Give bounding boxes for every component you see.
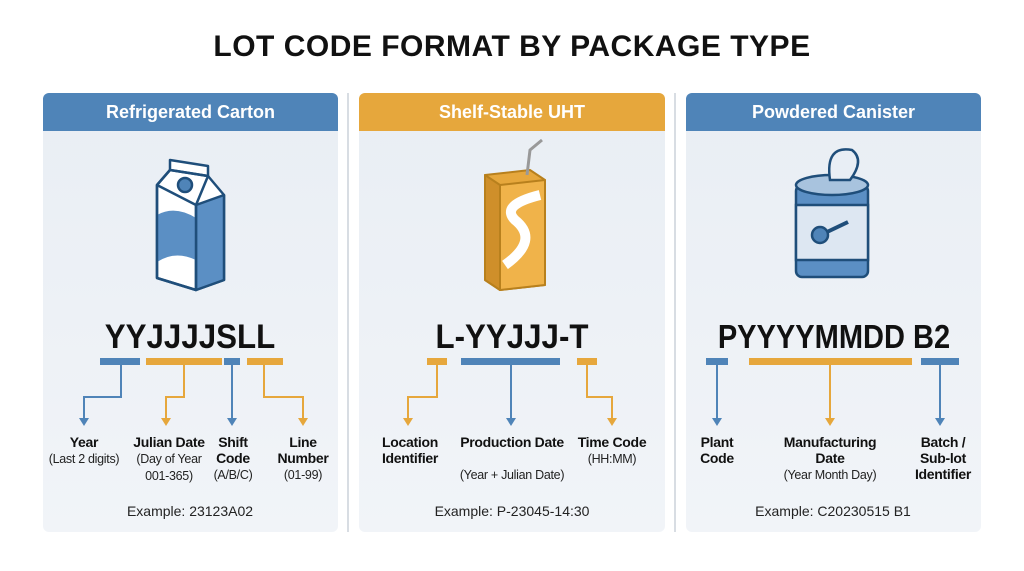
label: manufacturing date: Manufacturing bbox=[784, 434, 876, 450]
label: batch: Batch / bbox=[921, 434, 965, 450]
label: location: Location bbox=[382, 434, 438, 450]
label: location: Identifier bbox=[382, 450, 438, 466]
label: time code: (HH:MM) bbox=[588, 452, 636, 466]
label: year: Year bbox=[70, 434, 98, 450]
label: production date bbox=[460, 434, 564, 482]
icon: milk carton bbox=[157, 160, 224, 290]
label: shift code: Code bbox=[216, 450, 250, 466]
label: line number: (01-99) bbox=[284, 468, 322, 482]
label: year bbox=[49, 434, 119, 466]
header: shelf-stable UHT bbox=[359, 93, 665, 131]
label: batch bbox=[915, 434, 972, 482]
header: powdered canister bbox=[686, 93, 981, 131]
code: panel 2: L-YYJJJ-T bbox=[436, 318, 588, 356]
bars & arrows bbox=[84, 358, 959, 424]
code: panel 3: PYYYYMMDD B2 bbox=[718, 318, 950, 355]
label: manufacturing date: (Year Month Day) bbox=[784, 468, 876, 482]
header: refrigerated carton bbox=[43, 93, 338, 131]
label: time code: Time Code bbox=[578, 434, 646, 450]
label: batch: Identifier bbox=[915, 466, 971, 482]
panel: refrigerated carton bbox=[43, 93, 338, 532]
label: location bbox=[382, 434, 438, 466]
example 1: Example: 23123A02 bbox=[127, 503, 253, 519]
label: julian date: 001-365) bbox=[145, 469, 193, 483]
label: line number bbox=[277, 434, 329, 482]
label: julian date: Julian Date bbox=[133, 434, 205, 450]
label: batch: Sub-lot bbox=[920, 450, 966, 466]
icon: UHT box bbox=[485, 140, 545, 290]
label: plant code: Code bbox=[700, 450, 734, 466]
label: plant code bbox=[700, 434, 734, 466]
title: LOT CODE FORMAT BY PACKAGE TYPE bbox=[213, 30, 811, 63]
label: year: (Last 2 digits) bbox=[49, 452, 119, 466]
label: julian date: (Day of Year bbox=[136, 452, 202, 466]
header: powdered canister: Powdered Canister bbox=[752, 102, 915, 122]
example 3: Example: C20230515 B1 bbox=[755, 503, 911, 519]
header: refrigerated carton: Refrigerated Carton bbox=[106, 102, 275, 122]
label: production date: Production Date bbox=[460, 434, 564, 450]
panel: shelf-stable UHT bbox=[359, 93, 665, 532]
label: julian date bbox=[133, 434, 205, 483]
label: line number: Line bbox=[289, 434, 317, 450]
header: shelf-stable UHT: Shelf-Stable UHT bbox=[439, 102, 585, 122]
panel: powdered canister bbox=[686, 93, 981, 532]
code: panel 1: YYJJJJSLL bbox=[105, 318, 275, 356]
label: plant code: Plant bbox=[701, 434, 733, 450]
label: shift code: (A/B/C) bbox=[214, 468, 252, 482]
icon: powder canister bbox=[796, 149, 868, 277]
label: manufacturing date: Date bbox=[815, 450, 845, 466]
label: manufacturing date bbox=[784, 434, 876, 482]
example 2: Example: P-23045-14:30 bbox=[435, 503, 589, 519]
label: shift code: Shift bbox=[218, 434, 248, 450]
label: shift code bbox=[214, 434, 252, 482]
label: time code bbox=[578, 434, 646, 466]
label: production date: (Year + Julian Date) bbox=[460, 468, 564, 482]
label: line number: Number bbox=[277, 450, 329, 466]
